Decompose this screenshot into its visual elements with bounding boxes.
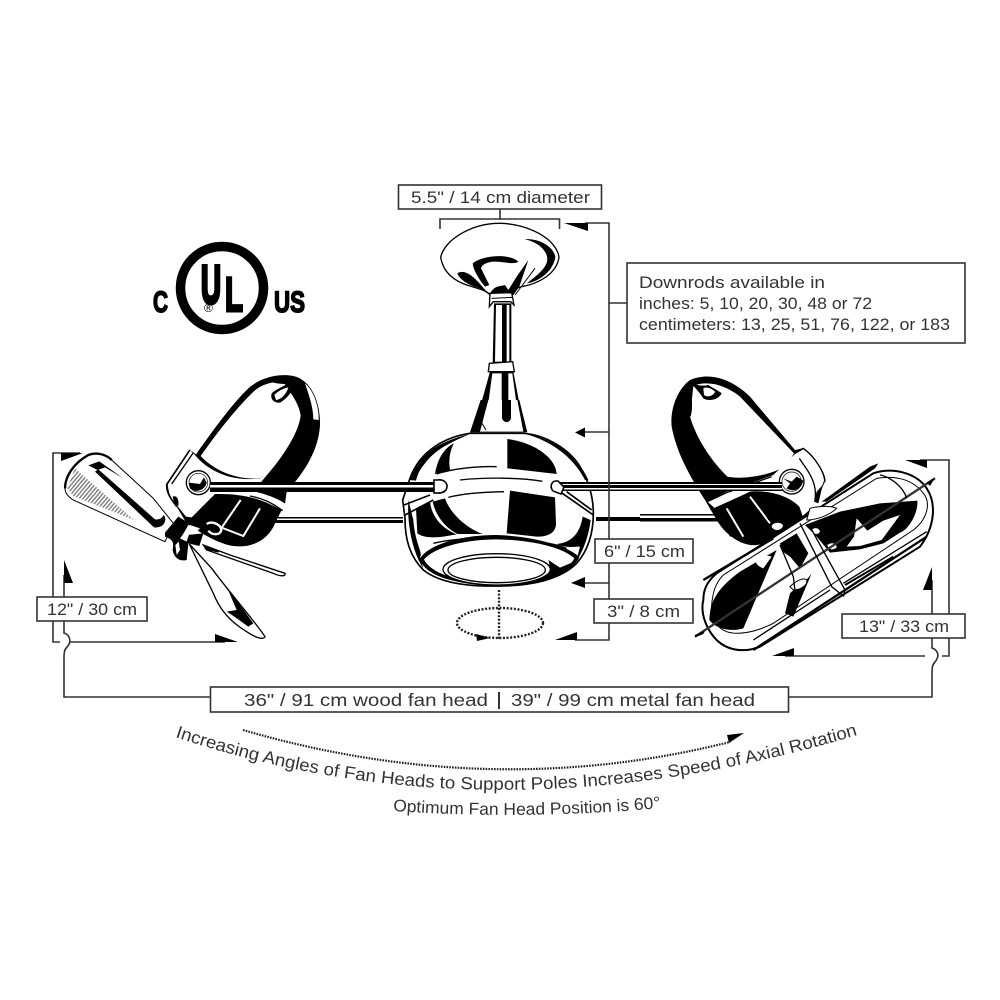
body shell xyxy=(403,433,593,586)
UL certification logo: US xyxy=(274,286,305,319)
lower dish xyxy=(420,535,579,586)
wood blades small xyxy=(165,517,285,638)
left fan head (wood blades) xyxy=(65,375,320,638)
13 inch label xyxy=(842,614,965,638)
diameter label: 5.5" / 14 cm diameter xyxy=(411,188,590,207)
downrods callout: centimeters: 13, 25, 51, 76, 122, or 183 xyxy=(639,315,950,334)
overall span label xyxy=(210,687,788,712)
central motor housing xyxy=(403,400,593,586)
upper support arm xyxy=(210,480,782,494)
metal fan cage and blades xyxy=(695,463,935,650)
overall span label: 39" / 99 cm metal fan head xyxy=(511,690,755,710)
diameter label xyxy=(398,185,602,229)
12 inch label: 12" / 30 cm xyxy=(47,600,137,619)
6 inch label xyxy=(595,539,693,563)
axial rotation indicator xyxy=(457,590,543,641)
ceiling canopy xyxy=(441,223,559,307)
neck xyxy=(470,400,527,432)
height dimension line with arrows xyxy=(555,223,627,640)
downrod stem xyxy=(479,303,521,410)
rear housing xyxy=(671,377,825,545)
UL certification logo: ® xyxy=(204,301,213,315)
13 inch label: 13" / 33 cm xyxy=(859,617,949,636)
UL certification logo: C xyxy=(153,286,168,319)
3 inch label xyxy=(594,599,693,623)
rear housing xyxy=(166,375,320,546)
curved caption: Optimum Fan Head Position is 60° xyxy=(394,796,659,816)
UL certification logo: L xyxy=(225,269,243,322)
6 inch label: 6" / 15 cm xyxy=(604,542,685,561)
body reflections xyxy=(404,433,593,568)
curved caption: Increasing Angles of Fan Heads to Support Poles Increases Speed of Axial Rotation xyxy=(176,726,856,794)
downrods callout: inches: 5, 10, 20, 30, 48 or 72 xyxy=(639,294,872,313)
left blade dimension lines xyxy=(53,453,238,697)
UL certification logo: U xyxy=(201,255,221,315)
downrods callout xyxy=(627,263,965,343)
UL certification logo xyxy=(153,246,305,330)
dotted rotation speed arrow xyxy=(243,730,744,769)
right fan head (metal) xyxy=(671,377,935,650)
lower support pole xyxy=(273,514,718,523)
overall span label: 36" / 91 cm wood fan head xyxy=(244,690,488,710)
3 inch label: 3" / 8 cm xyxy=(607,602,680,621)
right blade dimension lines xyxy=(772,460,949,697)
12 inch label xyxy=(37,597,147,621)
wood blade large xyxy=(65,453,173,542)
downrods callout: Downrods available in xyxy=(639,273,825,292)
